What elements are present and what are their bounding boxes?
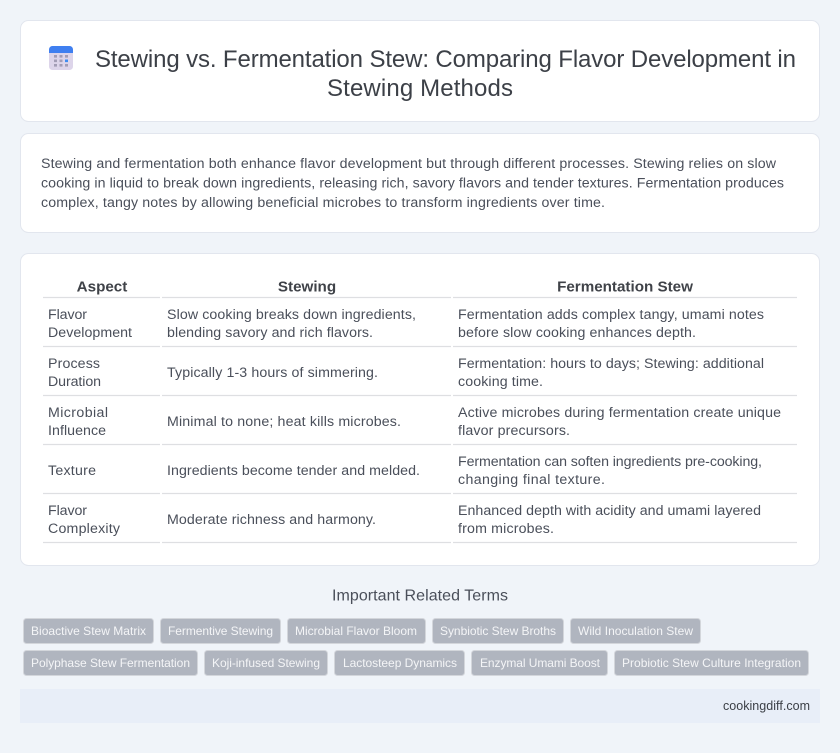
row: flavor complexity: Flavor bbox=[48, 503, 87, 519]
title: Stewing Methods bbox=[327, 75, 513, 102]
icon: calendar bbox=[49, 46, 73, 70]
row: flavor complexity bbox=[48, 503, 761, 537]
tags: related terms: Koji-infused Stewing bbox=[212, 656, 320, 670]
panel: comparison table bbox=[20, 254, 820, 566]
tags: related terms: Microbial Flavor Bloom bbox=[295, 624, 417, 638]
row: texture bbox=[48, 454, 762, 488]
row: flavor development bbox=[48, 307, 764, 341]
row: process duration: cooking time. bbox=[458, 374, 543, 390]
row: microbial influence: Minimal to none; heat kills microbes. bbox=[167, 414, 401, 430]
table header: Fermentation Stew bbox=[557, 278, 693, 296]
row: texture: Ingredients become tender and melded. bbox=[167, 463, 420, 479]
row: texture: changing final texture. bbox=[458, 472, 605, 488]
row: process duration: Fermentation: hours to days; Stewing: additional bbox=[458, 356, 764, 372]
panel: introduction bbox=[20, 134, 820, 232]
tags: related terms: Enzymal Umami Boost bbox=[480, 656, 601, 670]
title bbox=[95, 46, 796, 102]
panel: title header bbox=[20, 20, 820, 122]
row: flavor development: before slow cooking enhances depth. bbox=[458, 325, 696, 341]
tags: related terms: Polyphase Stew Fermentation bbox=[31, 656, 190, 670]
title: Stewing vs. Fermentation Stew: Comparing Flavor Development in bbox=[95, 46, 796, 73]
row: flavor development: blending savory and rich flavors. bbox=[167, 325, 373, 341]
row: flavor complexity: Enhanced depth with acidity and umami layered bbox=[458, 503, 761, 519]
row: microbial influence: flavor precursors. bbox=[458, 423, 570, 439]
heading: important related terms: Important Related Terms bbox=[332, 588, 508, 604]
row: flavor complexity: Moderate richness and harmony. bbox=[167, 512, 376, 528]
row: process duration: Duration bbox=[48, 374, 101, 390]
row: flavor development: Fermentation adds complex tangy, umami notes bbox=[458, 307, 764, 323]
row: flavor complexity: from microbes. bbox=[458, 521, 554, 537]
intro text bbox=[41, 156, 784, 211]
intro text: Stewing and fermentation both enhance flavor development but through different processes. Stewing relies on slow bbox=[41, 156, 777, 172]
table header bbox=[77, 278, 693, 296]
row: flavor development: Flavor bbox=[48, 307, 87, 323]
row: process duration bbox=[48, 356, 764, 390]
tags: related terms: Fermentive Stewing bbox=[168, 624, 273, 638]
row: process duration: Process bbox=[48, 356, 100, 372]
row: process duration: Typically 1-3 hours of simmering. bbox=[167, 365, 378, 381]
footer: cookingdiff.com bbox=[723, 699, 810, 713]
row: microbial influence bbox=[48, 405, 781, 439]
tags: related terms: Synbiotic Stew Broths bbox=[440, 624, 556, 638]
row: texture: Fermentation can soften ingredients pre-cooking, bbox=[458, 454, 762, 470]
row: microbial influence: Active microbes during fermentation create unique bbox=[458, 405, 781, 421]
tags: related terms bbox=[24, 618, 808, 676]
row: microbial influence: Influence bbox=[48, 423, 106, 439]
row: flavor complexity: Complexity bbox=[48, 521, 121, 537]
tags: related terms: Bioactive Stew Matrix bbox=[31, 624, 146, 638]
row: texture: Texture bbox=[48, 463, 96, 479]
intro text: complex, tangy notes by allowing beneficial microbes to transform ingredients over time. bbox=[41, 195, 605, 211]
row: microbial influence: Microbial bbox=[48, 405, 108, 421]
intro text: cooking in liquid to break down ingredients, releasing rich, savory flavors and tender textures. Fermentation produces bbox=[41, 176, 784, 192]
footer bbox=[20, 689, 820, 723]
table header: Aspect bbox=[77, 278, 127, 296]
tags: related terms: Probiotic Stew Culture Integration bbox=[622, 656, 801, 670]
tags: related terms: Lactosteep Dynamics bbox=[343, 656, 457, 670]
row: flavor development: Slow cooking breaks down ingredients, bbox=[167, 307, 416, 323]
tags: related terms: Wild Inoculation Stew bbox=[578, 624, 693, 638]
table header: Stewing bbox=[278, 278, 336, 296]
row: flavor development: Development bbox=[48, 325, 132, 341]
